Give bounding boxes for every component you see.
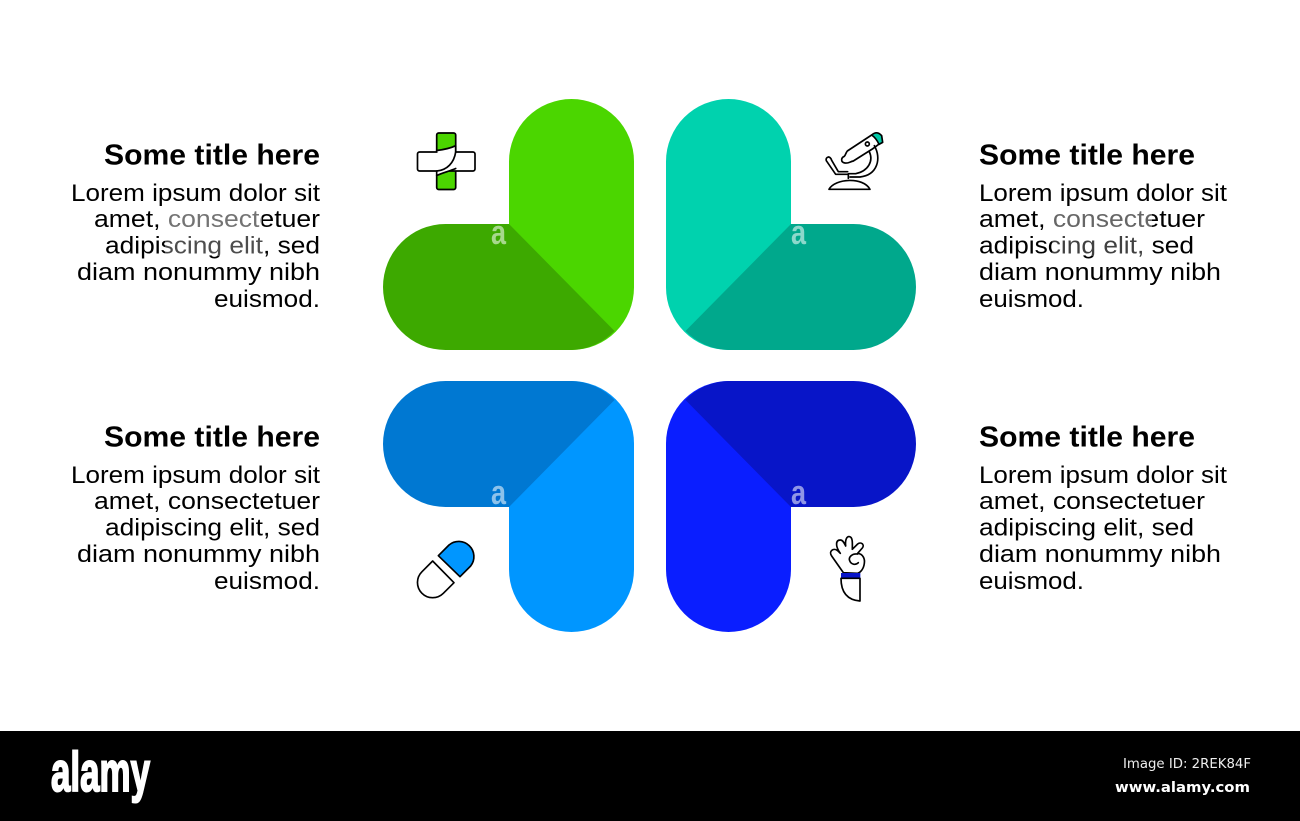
watermark letters over petals: a [491,214,507,252]
footer bar [0,731,1300,821]
petal: green top-left [383,99,634,350]
text block: top right: amet, consectetuer [979,206,1205,233]
text block: bottom left: euismod. [214,568,320,595]
text block: top left: adipiscing elit, sed [105,232,320,260]
text block: bottom left [71,422,320,595]
icon: capsule pill [417,541,474,598]
website: www.alamy.com [1115,780,1250,796]
text block: bottom right: adipiscing elit, sed [979,514,1194,542]
alamy logo: alamy [51,740,150,803]
petal: blue bottom-left [383,381,634,632]
text block: bottom right: euismod. [979,568,1084,595]
watermark letters over petals: a [491,474,507,512]
text block: top right: adipiscing elit, sed [979,232,1194,260]
text block: bottom left: amet, consectetuer [94,488,320,515]
text block: top left: euismod. [214,286,320,313]
text block: top right [979,140,1227,313]
text block: top right: Lorem ipsum dolor sit [979,180,1227,207]
text block: bottom right: Some title here [979,422,1195,454]
petal: navy bottom-right [666,381,916,632]
text block: bottom left: Some title here [104,422,320,454]
text block: top left: Lorem ipsum dolor sit [71,180,320,207]
text block: bottom left: adipiscing elit, sed [105,514,320,542]
text block: top left: amet, consectetuer [94,206,320,233]
icon: bandaged cross [418,133,475,190]
text block: bottom left: Lorem ipsum dolor sit [71,462,320,489]
watermark letters over petals [491,214,807,512]
watermark letters over petals: a [791,214,807,252]
text block: top right: Some title here [979,140,1195,172]
watermark letters over petals: a [791,474,807,512]
text block: top right: diam nonummy nibh [979,259,1221,286]
image id: Image ID: 2REK84F [1123,756,1251,772]
icon: microscope [826,133,883,189]
text block: bottom right [979,422,1227,595]
text block: top left [71,140,320,313]
text block: bottom right: amet, consectetuer [979,488,1205,515]
icon: OK hand with cuff [831,537,864,601]
text block: bottom right: diam nonummy nibh [979,541,1221,568]
text block: top left: diam nonummy nibh [77,259,320,286]
text block: bottom right: Lorem ipsum dolor sit [979,462,1227,489]
text block: top right: euismod. [979,286,1084,313]
petal: teal top-right [666,99,916,350]
text block: top left: Some title here [104,140,320,172]
text block: bottom left: diam nonummy nibh [77,541,320,568]
